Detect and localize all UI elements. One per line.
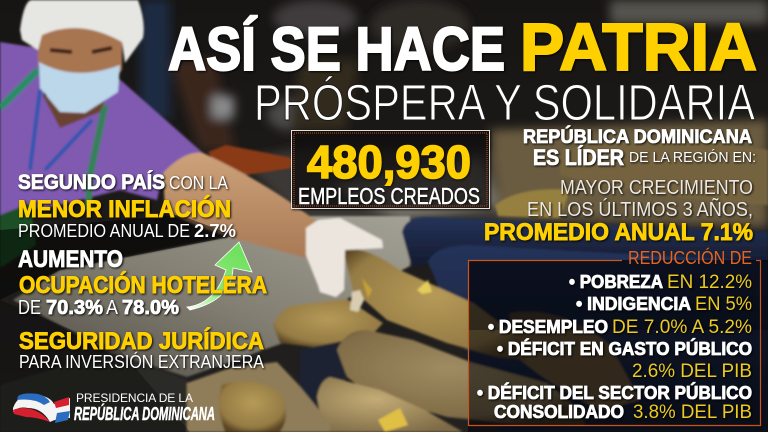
text block: hotel occupancy: DE xyxy=(18,297,41,319)
text block: hotel occupancy: 78.0% xyxy=(122,297,179,319)
reductions heading: REDUCCIÓN DE xyxy=(628,247,752,268)
yellow flesh patches xyxy=(417,280,432,294)
glove xyxy=(306,218,383,297)
text block: inflation: PROMEDIO ANUAL DE xyxy=(18,221,190,241)
panel: left indicators xyxy=(18,171,267,372)
text block: legal security xyxy=(19,327,264,372)
text block: inflation: SEGUNDO PAÍS xyxy=(18,171,165,194)
list: reductions: • POBREZA xyxy=(569,272,663,292)
yuca roots xyxy=(510,312,640,410)
list: reductions: • DESEMPLEO xyxy=(488,317,608,337)
text block: regional leader: DE LA REGIÓN EN: xyxy=(629,149,756,166)
icon: flag xyxy=(13,393,70,423)
panel: jobs created xyxy=(292,130,490,209)
text block: hotel occupancy: OCUPACIÓN HOTELERA xyxy=(19,271,267,299)
worker shirt xyxy=(0,42,203,215)
text block: inflation: CON LA xyxy=(169,173,228,193)
text block: inflation xyxy=(18,171,236,241)
mask xyxy=(39,62,120,113)
panel: reductions xyxy=(468,247,760,426)
list: reductions: EN 5% xyxy=(695,294,752,315)
text block: hotel occupancy xyxy=(18,246,267,319)
list: reductions xyxy=(477,272,752,423)
text block: regional leader: REPÚBLICA DOMINICANA xyxy=(523,126,752,148)
text block: inflation: MENOR INFLACIÓN xyxy=(18,195,231,223)
jobs label: EMPLEOS CREADOS xyxy=(298,183,480,209)
list: reductions: DE 7.0% A 5.2% xyxy=(612,317,752,338)
list: reductions: 2.6% DEL PIB xyxy=(632,361,752,382)
title: PATRIA xyxy=(520,10,757,85)
logo: Presidencia de la República Dominicana: REPÚBLICA DOMINICANA xyxy=(74,403,215,424)
text block: hotel occupancy: A xyxy=(106,297,119,319)
title: ASÍ SE HACE xyxy=(168,15,505,83)
text block: hotel occupancy: AUMENTO xyxy=(18,246,123,273)
logo: Presidencia de la República Dominicana: PRESIDENCIA DE LA xyxy=(76,391,193,405)
text block: regional leader xyxy=(523,126,756,170)
neck xyxy=(43,96,105,128)
text block: legal security: PARA INVERSIÓN EXTRANJERA xyxy=(19,351,264,372)
list: reductions: EN 12.2% xyxy=(667,272,752,293)
orange crate xyxy=(208,145,292,178)
text block: regional leader: ES LÍDER xyxy=(533,145,624,170)
hairnet xyxy=(20,0,144,63)
jobs number: 480,930 xyxy=(307,136,471,188)
text block: growth: PROMEDIO ANUAL 7.1% xyxy=(484,219,753,246)
icon: rising green arrow xyxy=(187,242,252,310)
text block: inflation: 2.7% xyxy=(194,221,236,241)
list: reductions: CONSOLIDADO xyxy=(494,402,624,422)
list: reductions: • DÉFICIT EN GASTO PÚBLICO xyxy=(497,338,752,359)
lanyards xyxy=(0,70,38,108)
text block: growth xyxy=(484,177,753,246)
list: reductions: • INDIGENCIA xyxy=(576,294,691,314)
yuca behind title xyxy=(495,189,570,218)
list: reductions: • DÉFICIT DEL SECTOR PÚBLICO xyxy=(477,382,752,403)
text block: legal security: SEGURIDAD JURÍDICA xyxy=(19,327,264,355)
face xyxy=(38,25,122,85)
text block: hotel occupancy: 70.3% xyxy=(46,297,103,319)
logo: Presidencia de la República Dominicana xyxy=(13,391,215,424)
worker arm xyxy=(163,153,318,258)
darkening overlays xyxy=(0,215,235,300)
list: reductions: 3.8% DEL PIB xyxy=(633,402,752,423)
blue bins xyxy=(402,217,768,268)
title xyxy=(168,10,757,85)
table xyxy=(13,216,410,377)
